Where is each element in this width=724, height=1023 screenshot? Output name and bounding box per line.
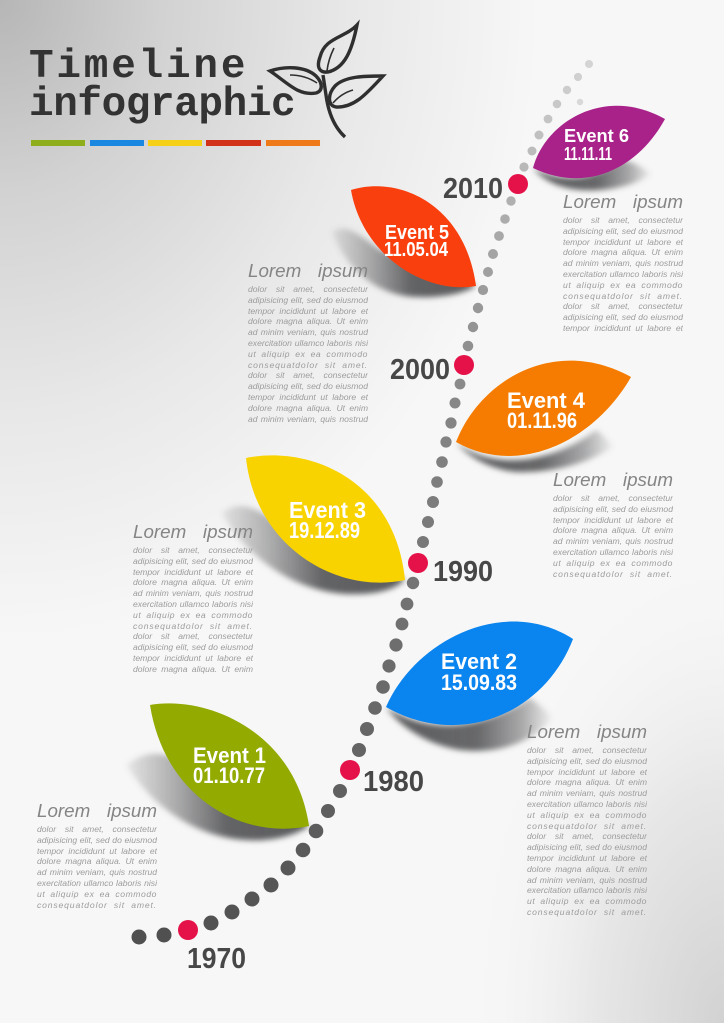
text block: event 6: Lorem ipsum [563,191,683,212]
text block: event 5 [248,260,368,424]
text block: event 1: Lorem ipsum [37,800,157,821]
text block: event 2: exercitation ullamco laboris nisi [527,799,647,809]
text block: event 5: dolor sit amet, consectetur [248,370,368,380]
text block: event 2: tempor incididunt ut labore et [527,853,647,863]
text block: event 6: dolore magna aliqua. Ut enim [563,247,683,257]
text block: event 2: ad minim veniam, quis nostrud [527,875,647,885]
title: Timeline [29,44,248,90]
text block: event 6: ad minim veniam, quis nostrud [563,258,683,268]
text block: event 2: consequatdolor sit amet. [527,907,647,917]
text block: event 1: ut aliquip ex ea commodo [37,889,157,899]
text block: event 6: adipisicing elit, sed do eiusmod [563,312,683,322]
leaf: event 6: Event 6 [564,126,629,146]
leaf: event 2: Event 2 [441,649,517,674]
text block: event 4: consequatdolor sit amet. [553,569,673,579]
year labels: 2010 [443,173,503,205]
text block: event 5: adipisicing elit, sed do eiusmod [248,295,368,305]
leaf: event 2: 15.09.83 [441,670,517,695]
text block: event 5: exercitation ullamco laboris nisi [248,338,368,348]
text block: event 5: ut aliquip ex ea commodo [248,349,368,359]
text block: event 5: consequatdolor sit amet. [248,360,368,370]
text block: event 6: adipisicing elit, sed do eiusmod [563,226,683,236]
text block: event 4: dolor sit amet, consectetur [553,493,673,503]
year labels: 1990 [433,556,493,588]
text block: event 5: dolor sit amet, consectetur [248,284,368,294]
text block: event 3: dolor sit amet, consectetur [133,545,253,555]
text block: event 1: dolore magna aliqua. Ut enim [37,856,157,866]
text block: event 6: tempor incididunt ut labore et [563,323,683,333]
text block: event 6: consequatdolor sit amet. [563,291,683,301]
leaf: event 1: Event 1 [193,743,266,768]
text block: event 3: tempor incididunt ut labore et [133,653,253,663]
text block: event 2: exercitation ullamco laboris nisi [527,885,647,895]
text block: event 2: consequatdolor sit amet. [527,821,647,831]
text block: event 2: ad minim veniam, quis nostrud [527,788,647,798]
text block: event 5: tempor incididunt ut labore et [248,306,368,316]
text block: event 3: consequatdolor sit amet. [133,621,253,631]
text block: event 4: tempor incididunt ut labore et [553,515,673,525]
text block: event 2: ut aliquip ex ea commodo [527,810,647,820]
text block: event 5: dolore magna aliqua. Ut enim [248,403,368,413]
text block: event 5: ad minim veniam, quis nostrud [248,414,368,424]
leaf: event 1: 01.10.77 [193,763,265,788]
text block: event 3: dolor sit amet, consectetur [133,631,253,641]
year labels [187,173,503,975]
leaf: event 3: Event 3 [289,497,366,523]
leaf: event 3: 19.12.89 [289,517,360,543]
text block: event 3: tempor incididunt ut labore et [133,567,253,577]
text block: event 2: ut aliquip ex ea commodo [527,896,647,906]
text block: event 3: ad minim veniam, quis nostrud [133,588,253,598]
text block: event 5: dolore magna aliqua. Ut enim [248,316,368,326]
text block: event 3: exercitation ullamco laboris nisi [133,599,253,609]
year labels: 2000 [390,354,450,386]
text block: event 1 [37,800,157,910]
text block: event 6: dolor sit amet, consectetur [563,301,683,311]
text block: event 4: Lorem ipsum [553,469,673,490]
leaf: event 6 [533,106,665,190]
leaf: event 6: 11.11.11 [564,144,612,164]
icon: leaf sprig [270,25,383,137]
text block: event 3: dolore magna aliqua. Ut enim [133,577,253,587]
leaf: event 4: Event 4 [507,388,586,413]
text block: event 6: dolor sit amet, consectetur [563,215,683,225]
text block: event 4: ut aliquip ex ea commodo [553,558,673,568]
leaf: event 2 [386,621,573,751]
year labels: 1980 [363,766,424,798]
leaf: event 4 [456,361,631,472]
text block: event 5: adipisicing elit, sed do eiusmod [248,381,368,391]
text block: event 2: dolore magna aliqua. Ut enim [527,864,647,874]
text block: event 5: ad minim veniam, quis nostrud [248,327,368,337]
timeline dots [132,60,593,944]
leaf: event 3 [222,455,405,594]
text block: event 4: adipisicing elit, sed do eiusmod [553,504,673,514]
text block: event 2: Lorem ipsum [527,721,647,742]
text block: event 1: exercitation ullamco laboris nisi [37,878,157,888]
text block: event 1: ad minim veniam, quis nostrud [37,867,157,877]
leaf: event 5 [332,186,476,297]
text block: event 2: dolor sit amet, consectetur [527,745,647,755]
text block: event 2: adipisicing elit, sed do eiusmod [527,756,647,766]
title: infographic [29,82,295,128]
colour bars [31,140,320,146]
text block: event 4: dolore magna aliqua. Ut enim [553,525,673,535]
text block: event 2: dolor sit amet, consectetur [527,831,647,841]
leaf: event 4: 01.11.96 [507,408,577,433]
text block: event 5: Lorem ipsum [248,260,368,281]
year labels: 1970 [187,943,246,975]
leaf: event 5: 11.05.04 [384,239,449,261]
text block: event 6 [563,191,683,333]
text block: event 3: adipisicing elit, sed do eiusmod [133,642,253,652]
text block: event 2 [527,721,647,917]
text block: event 6: exercitation ullamco laboris nisi [563,269,683,279]
text block: event 2: tempor incididunt ut labore et [527,767,647,777]
year markers [178,174,528,940]
text block: event 2: adipisicing elit, sed do eiusmod [527,842,647,852]
text block: event 4 [553,469,673,579]
text block: event 4: exercitation ullamco laboris nisi [553,547,673,557]
text block: event 1: consequatdolor sit amet. [37,900,157,910]
text block: event 3: adipisicing elit, sed do eiusmod [133,556,253,566]
text block: event 4: ad minim veniam, quis nostrud [553,536,673,546]
text block: event 2: dolore magna aliqua. Ut enim [527,777,647,787]
text block: event 3: ut aliquip ex ea commodo [133,610,253,620]
text block: event 6: tempor incididunt ut labore et [563,237,683,247]
text block: event 1: tempor incididunt ut labore et [37,846,157,856]
text block: event 3: Lorem ipsum [133,521,253,542]
text block: event 1: dolor sit amet, consectetur [37,824,157,834]
text block: event 1: adipisicing elit, sed do eiusmod [37,835,157,845]
leaf: event 5: Event 5 [385,222,449,244]
text block: event 5: tempor incididunt ut labore et [248,392,368,402]
text block: event 6: ut aliquip ex ea commodo [563,280,683,290]
title [29,44,295,128]
text block: event 3 [133,521,253,674]
leaf: event 1 [127,703,309,840]
text block: event 3: dolore magna aliqua. Ut enim [133,664,253,674]
